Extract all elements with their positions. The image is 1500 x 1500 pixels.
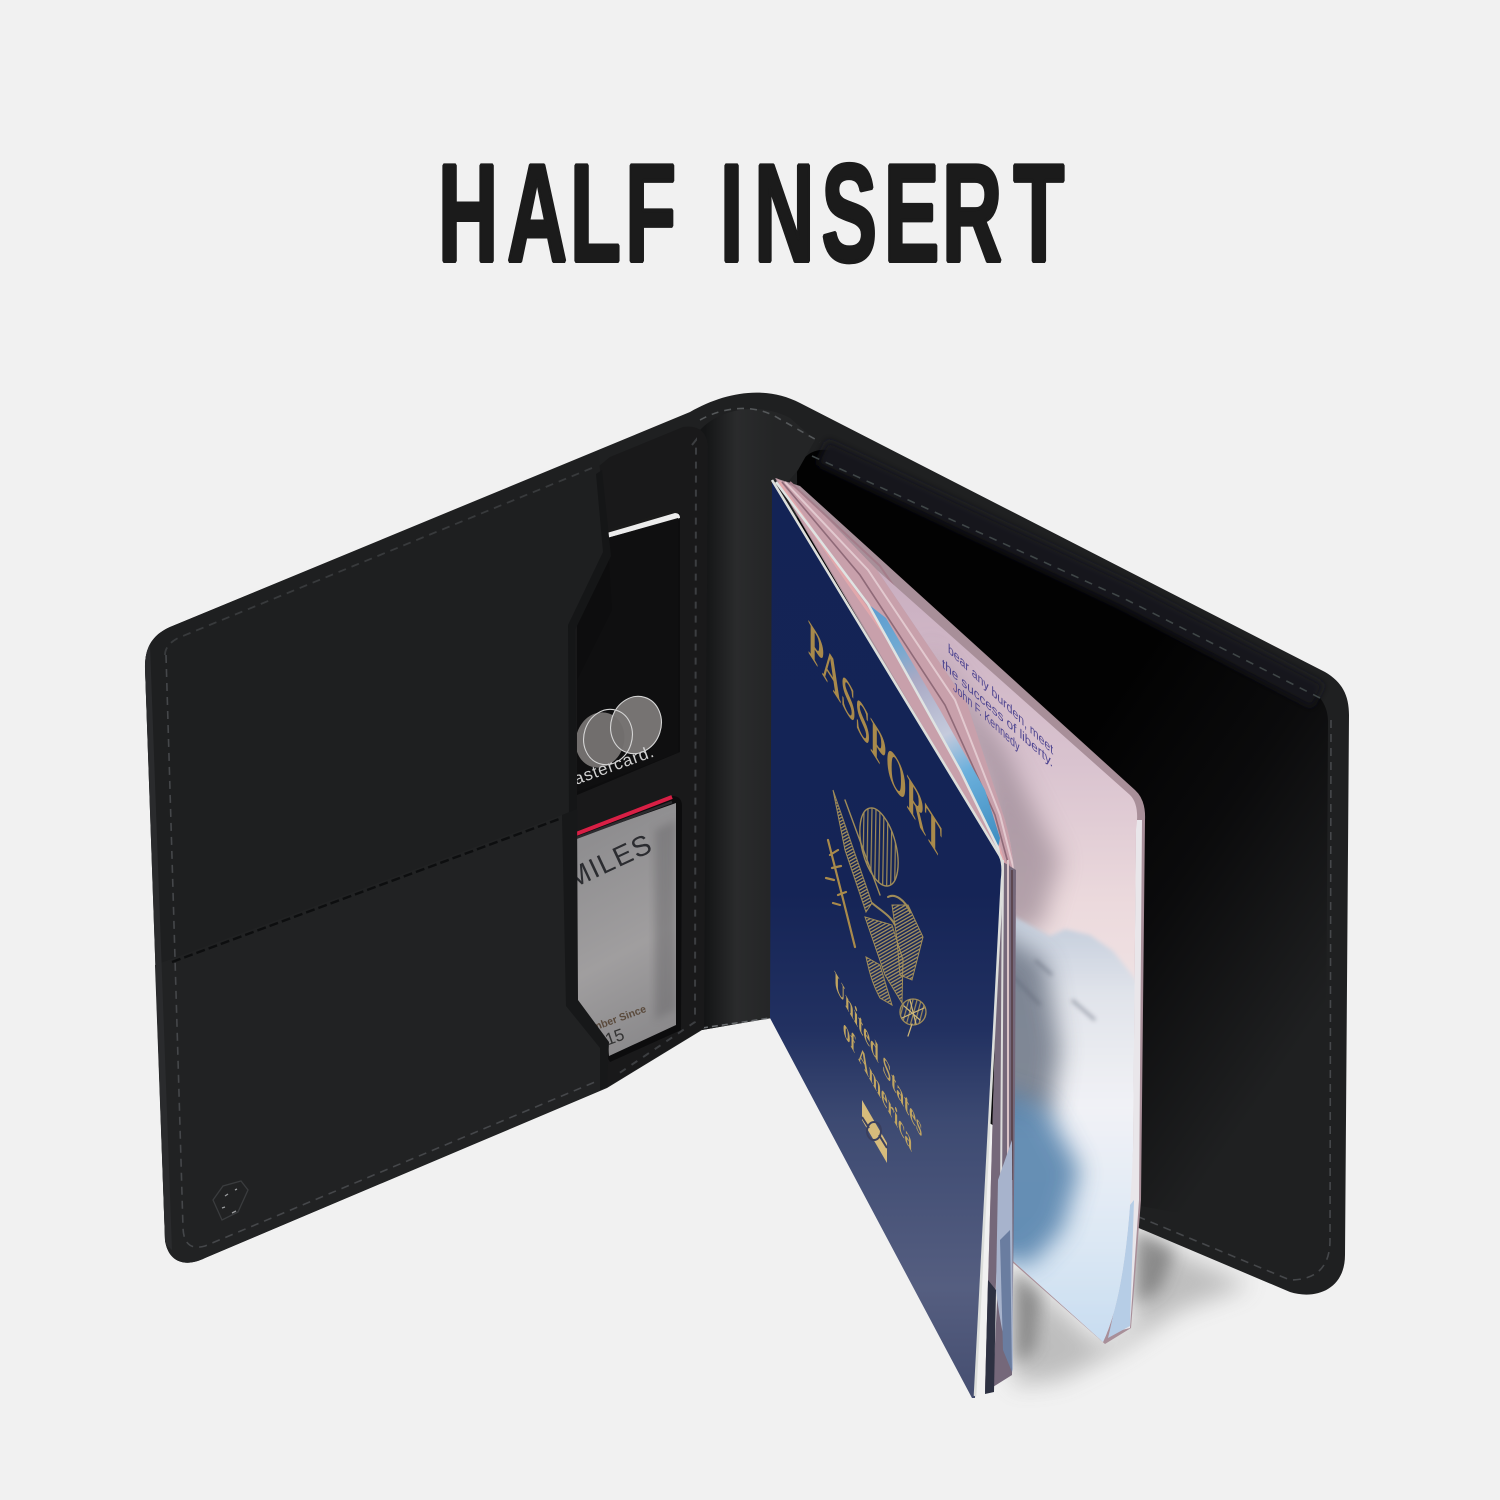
blue page sliver: [868, 604, 1000, 848]
blue wash: [985, 1085, 1080, 1265]
black mastercard: [577, 513, 680, 784]
spine bottom stitching: [702, 1018, 770, 1028]
icon: hexagon logo: [213, 1181, 248, 1220]
miles wordmark: MILES: [561, 828, 657, 894]
passport quote: John F. Kennedy: [953, 678, 1020, 755]
passport quote: the success of liberty.: [942, 655, 1053, 771]
passport quote: bear any burden, meet: [948, 640, 1053, 758]
mastercard wordmark: mastercard.: [557, 742, 657, 794]
panel: spine: [700, 408, 820, 1030]
year: 2015: [585, 1025, 627, 1056]
cover edge: [772, 480, 1003, 1396]
grey wash: [1015, 926, 1076, 1122]
pocket edge band: [568, 470, 611, 815]
pocket seam stitching: [172, 818, 562, 962]
member since: Member Since: [577, 1003, 648, 1039]
upper pocket stitching: [165, 468, 592, 655]
left edge stitching: [166, 655, 595, 1247]
page stack wedge: [776, 478, 1020, 1000]
spine stitching: [700, 408, 820, 442]
red card edge: [576, 797, 672, 834]
dark streaks: [1012, 960, 1095, 1020]
right edge stitching: [1110, 720, 1331, 1280]
star oval: [853, 804, 905, 890]
panel: card holder: [577, 438, 704, 1074]
top slot recess: [577, 513, 680, 795]
inner page shading: [940, 662, 1070, 932]
miles card: [577, 803, 676, 1056]
cast shadows: [1014, 1228, 1250, 1385]
page block edges: [775, 478, 1145, 1390]
panel: lower left pocket: [145, 645, 609, 1263]
white inner sheet: [776, 482, 1000, 860]
infographic canvas: [144, 162, 1349, 1398]
panel: upper left pocket: [145, 451, 611, 965]
passport quote: [942, 640, 1053, 771]
second card edge: [576, 802, 672, 838]
right inner stitching: [812, 456, 1320, 698]
arrows wing outer: [845, 800, 880, 895]
lower stacked sheets: [985, 860, 1016, 1394]
lower pocket edge band: [562, 809, 609, 1090]
arrows wing: [833, 790, 872, 912]
pink page: [877, 570, 1140, 1350]
thistle: [900, 999, 926, 1025]
tail: [866, 957, 892, 1005]
left rim: [145, 645, 172, 1250]
gold eagle emblem: [826, 790, 926, 1036]
icon: biometric chip: [862, 1100, 887, 1163]
logo arc above mark: [585, 602, 596, 620]
card face: [609, 518, 678, 538]
country name line two: of America: [843, 1012, 912, 1159]
passport: [770, 478, 1145, 1398]
holder stitching: [615, 440, 696, 1076]
card dark edge: [600, 510, 680, 535]
tm mark: TM: [594, 603, 606, 613]
right wing: [892, 905, 923, 980]
cover: [770, 480, 1003, 1398]
card highlight: [655, 820, 676, 1020]
wallet: open leather shell: [145, 393, 1349, 1295]
olive branch: [826, 840, 855, 947]
wallet outer edge: [145, 393, 1349, 1295]
title: HALF INSERT: [438, 136, 1064, 291]
eagle body: [865, 917, 903, 1003]
mountain art: [1014, 916, 1134, 1342]
card top edge: [608, 513, 680, 538]
head: [872, 896, 910, 925]
lower slot recess: [575, 796, 682, 1062]
card face: [577, 803, 676, 1056]
panel: right inner pocket: [797, 450, 1328, 1240]
right upper band: [822, 452, 1318, 696]
mastercard logo: [577, 696, 662, 768]
passport title: PASSPORT: [808, 607, 942, 873]
country name line one: United States: [834, 965, 922, 1145]
